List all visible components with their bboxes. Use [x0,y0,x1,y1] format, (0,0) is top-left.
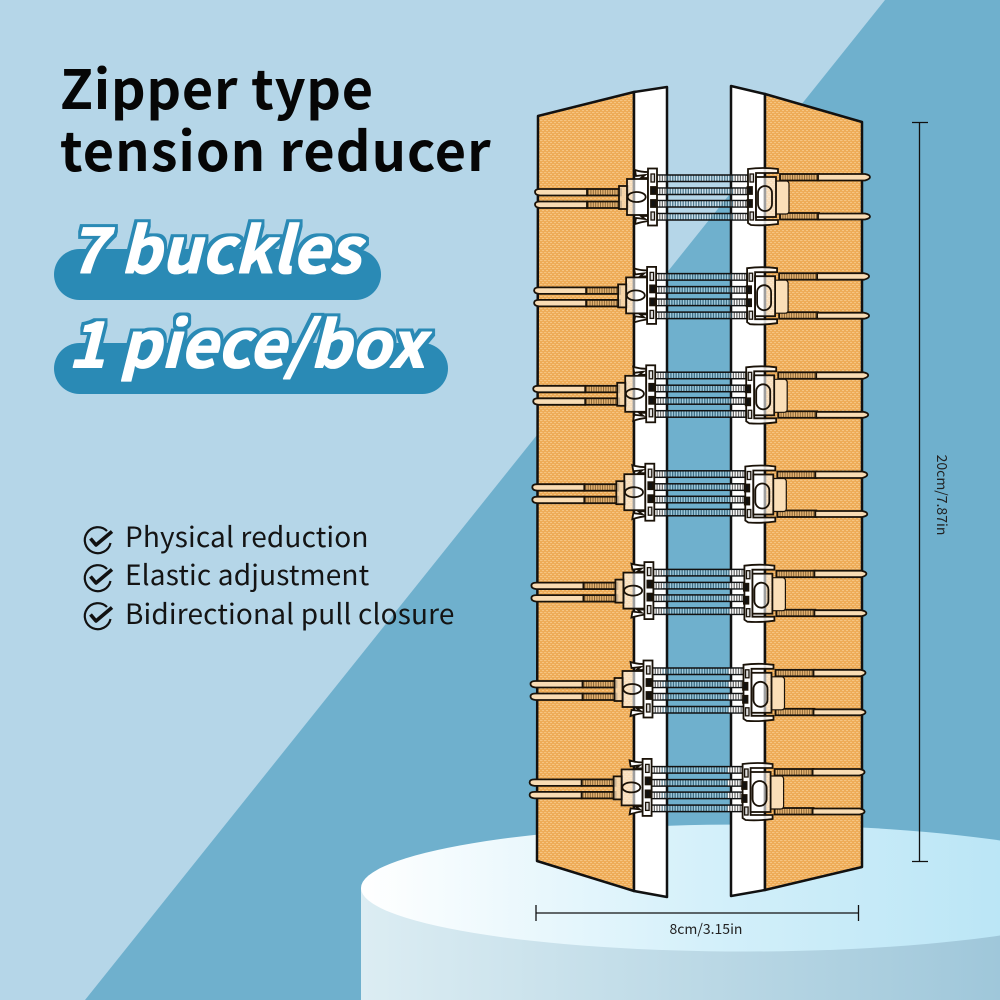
buckle row 1 [535,168,870,226]
height label: 20cm/7.87in [932,455,952,535]
width dimension line [536,905,858,921]
buckle row 5 [531,562,866,622]
podium cylinder [361,824,1000,1000]
buckle row 3 [533,365,868,424]
badge: 1 piece/box: 1 piece/box [68,294,432,386]
feature list [85,516,455,633]
left fabric panel [537,92,634,891]
feature: physical reduction: Physical reduction [125,516,369,556]
left white strip [634,87,667,897]
buckle row 6 [530,660,866,721]
buckle row 4 [532,464,867,523]
badge: 7 buckles: 7 buckles [69,201,366,292]
buckle row 7 [530,759,865,820]
buckle row 2 [534,267,869,325]
feature: bidirectional pull closure: Bidirectional pull closure [125,593,455,633]
height dimension line [912,122,928,862]
width label: 8cm/3.15in [670,919,742,939]
podium side [361,888,1000,1000]
feature: elastic adjustment: Elastic adjustment [125,554,370,594]
title: tension reducer [60,108,492,187]
title [60,46,492,187]
tension reducer product [530,86,870,897]
right fabric panel [765,94,862,890]
title: Zipper type [60,46,374,125]
right white strip [731,86,765,896]
podium top [361,824,1000,952]
